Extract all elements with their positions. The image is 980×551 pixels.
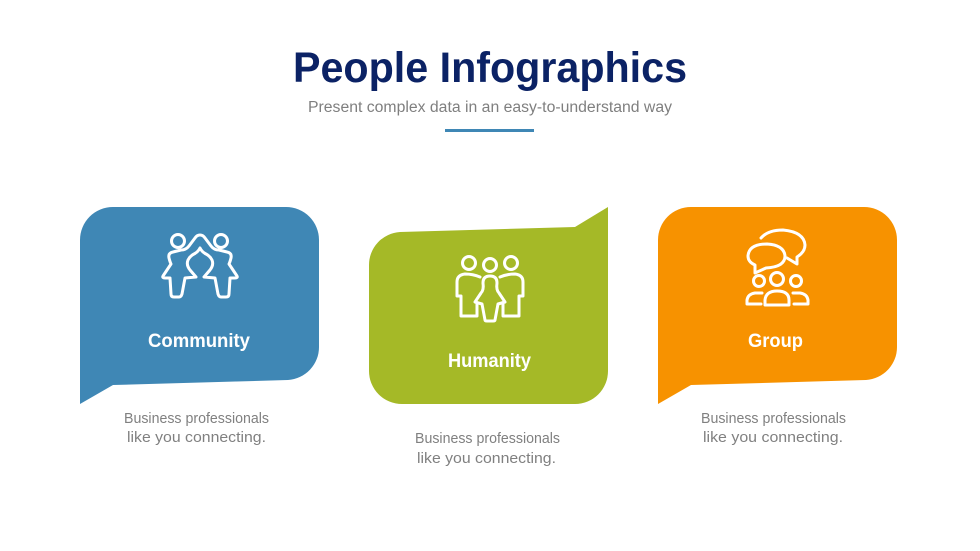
label: group: Group xyxy=(748,331,803,352)
icon: two people high five xyxy=(163,234,237,297)
panel: humanity xyxy=(369,207,608,404)
label: community: Community xyxy=(148,331,250,352)
icon: group conversation xyxy=(747,230,808,305)
speech bubble: group xyxy=(658,207,897,404)
title underline xyxy=(445,129,534,132)
speech bubble: community xyxy=(80,207,319,404)
speech bubble: humanity xyxy=(369,207,608,404)
panel: group xyxy=(658,207,897,404)
label: humanity: Humanity xyxy=(448,351,531,372)
text: humanity description: like you connecting. xyxy=(417,450,556,467)
text: community description xyxy=(124,410,269,446)
panel: community xyxy=(80,207,319,404)
title: People Infographics xyxy=(293,45,687,92)
icon: three people xyxy=(457,256,523,321)
text: community description: like you connecting. xyxy=(127,429,266,446)
text: community description: Business professionals xyxy=(124,410,269,427)
text: humanity description: Business professionals xyxy=(415,430,560,447)
subtitle: Present complex data in an easy-to-understand way xyxy=(308,99,672,116)
text: group description xyxy=(701,410,846,446)
text: group description: like you connecting. xyxy=(703,429,843,446)
text: humanity description xyxy=(415,430,560,467)
text: group description: Business professionals xyxy=(701,410,846,427)
